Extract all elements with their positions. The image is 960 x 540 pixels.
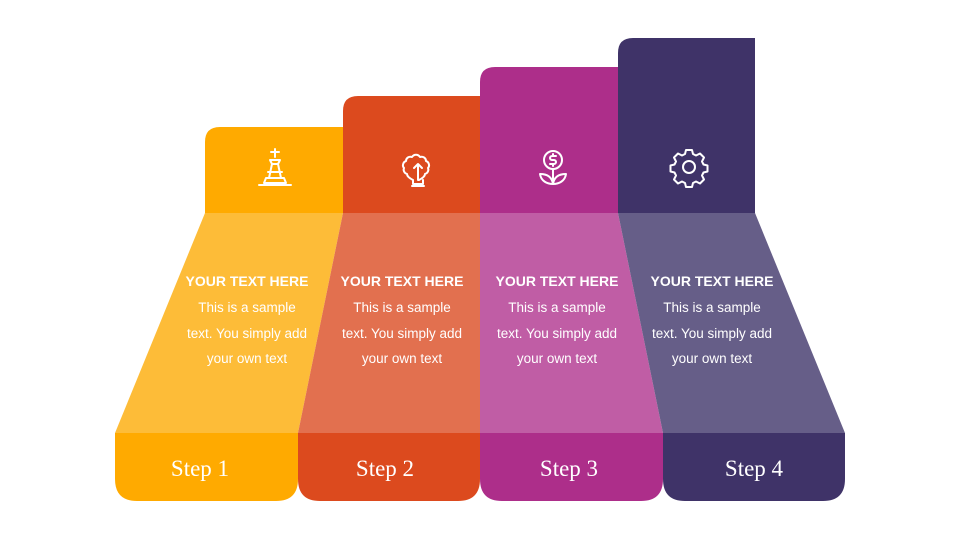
text 1: text. You simply add: [187, 326, 307, 341]
icon: money flower: [540, 151, 566, 184]
text 2: YOUR TEXT HERE: [341, 273, 463, 289]
text 3: text. You simply add: [497, 326, 617, 341]
tab 3: [480, 67, 618, 213]
tab 2: [343, 96, 480, 213]
text 2: text. You simply add: [342, 326, 462, 341]
step 1 column: [115, 127, 343, 501]
step 4 column: [618, 38, 845, 501]
base 4: [663, 433, 845, 501]
trapezoid 2: [298, 213, 480, 433]
icon: chess king: [259, 149, 291, 185]
text 1: This is a sample: [198, 300, 296, 315]
text 1: [186, 273, 308, 366]
text 3: This is a sample: [508, 300, 606, 315]
base 2: [298, 433, 480, 501]
tab 1: [205, 127, 343, 213]
text 4: text. You simply add: [652, 326, 772, 341]
text 4: your own text: [672, 351, 752, 366]
label: Step 4: Step 4: [725, 456, 784, 481]
text 4: [651, 273, 773, 366]
text 1: YOUR TEXT HERE: [186, 273, 308, 289]
text 2: your own text: [362, 351, 442, 366]
text 3: your own text: [517, 351, 597, 366]
text 2: This is a sample: [353, 300, 451, 315]
base 1: [115, 433, 298, 501]
text 1: your own text: [207, 351, 287, 366]
trapezoid 4: [618, 213, 845, 433]
text 3: YOUR TEXT HERE: [496, 273, 618, 289]
tab 4: [618, 38, 755, 213]
label: Step 3: Step 3: [540, 456, 598, 481]
text 4: This is a sample: [663, 300, 761, 315]
text 2: [341, 273, 463, 366]
text 4: YOUR TEXT HERE: [651, 273, 773, 289]
trapezoid 3: [480, 213, 663, 433]
trapezoid 1: [115, 213, 343, 433]
label: Step 2: Step 2: [356, 456, 414, 481]
base 3: [480, 433, 663, 501]
icon: gear: [670, 150, 708, 187]
label: Step 1: Step 1: [171, 456, 229, 481]
text 3: [496, 273, 618, 366]
step 3 column: [480, 67, 663, 501]
step 2 column: [298, 96, 480, 501]
icon: brain bulb: [403, 155, 429, 186]
